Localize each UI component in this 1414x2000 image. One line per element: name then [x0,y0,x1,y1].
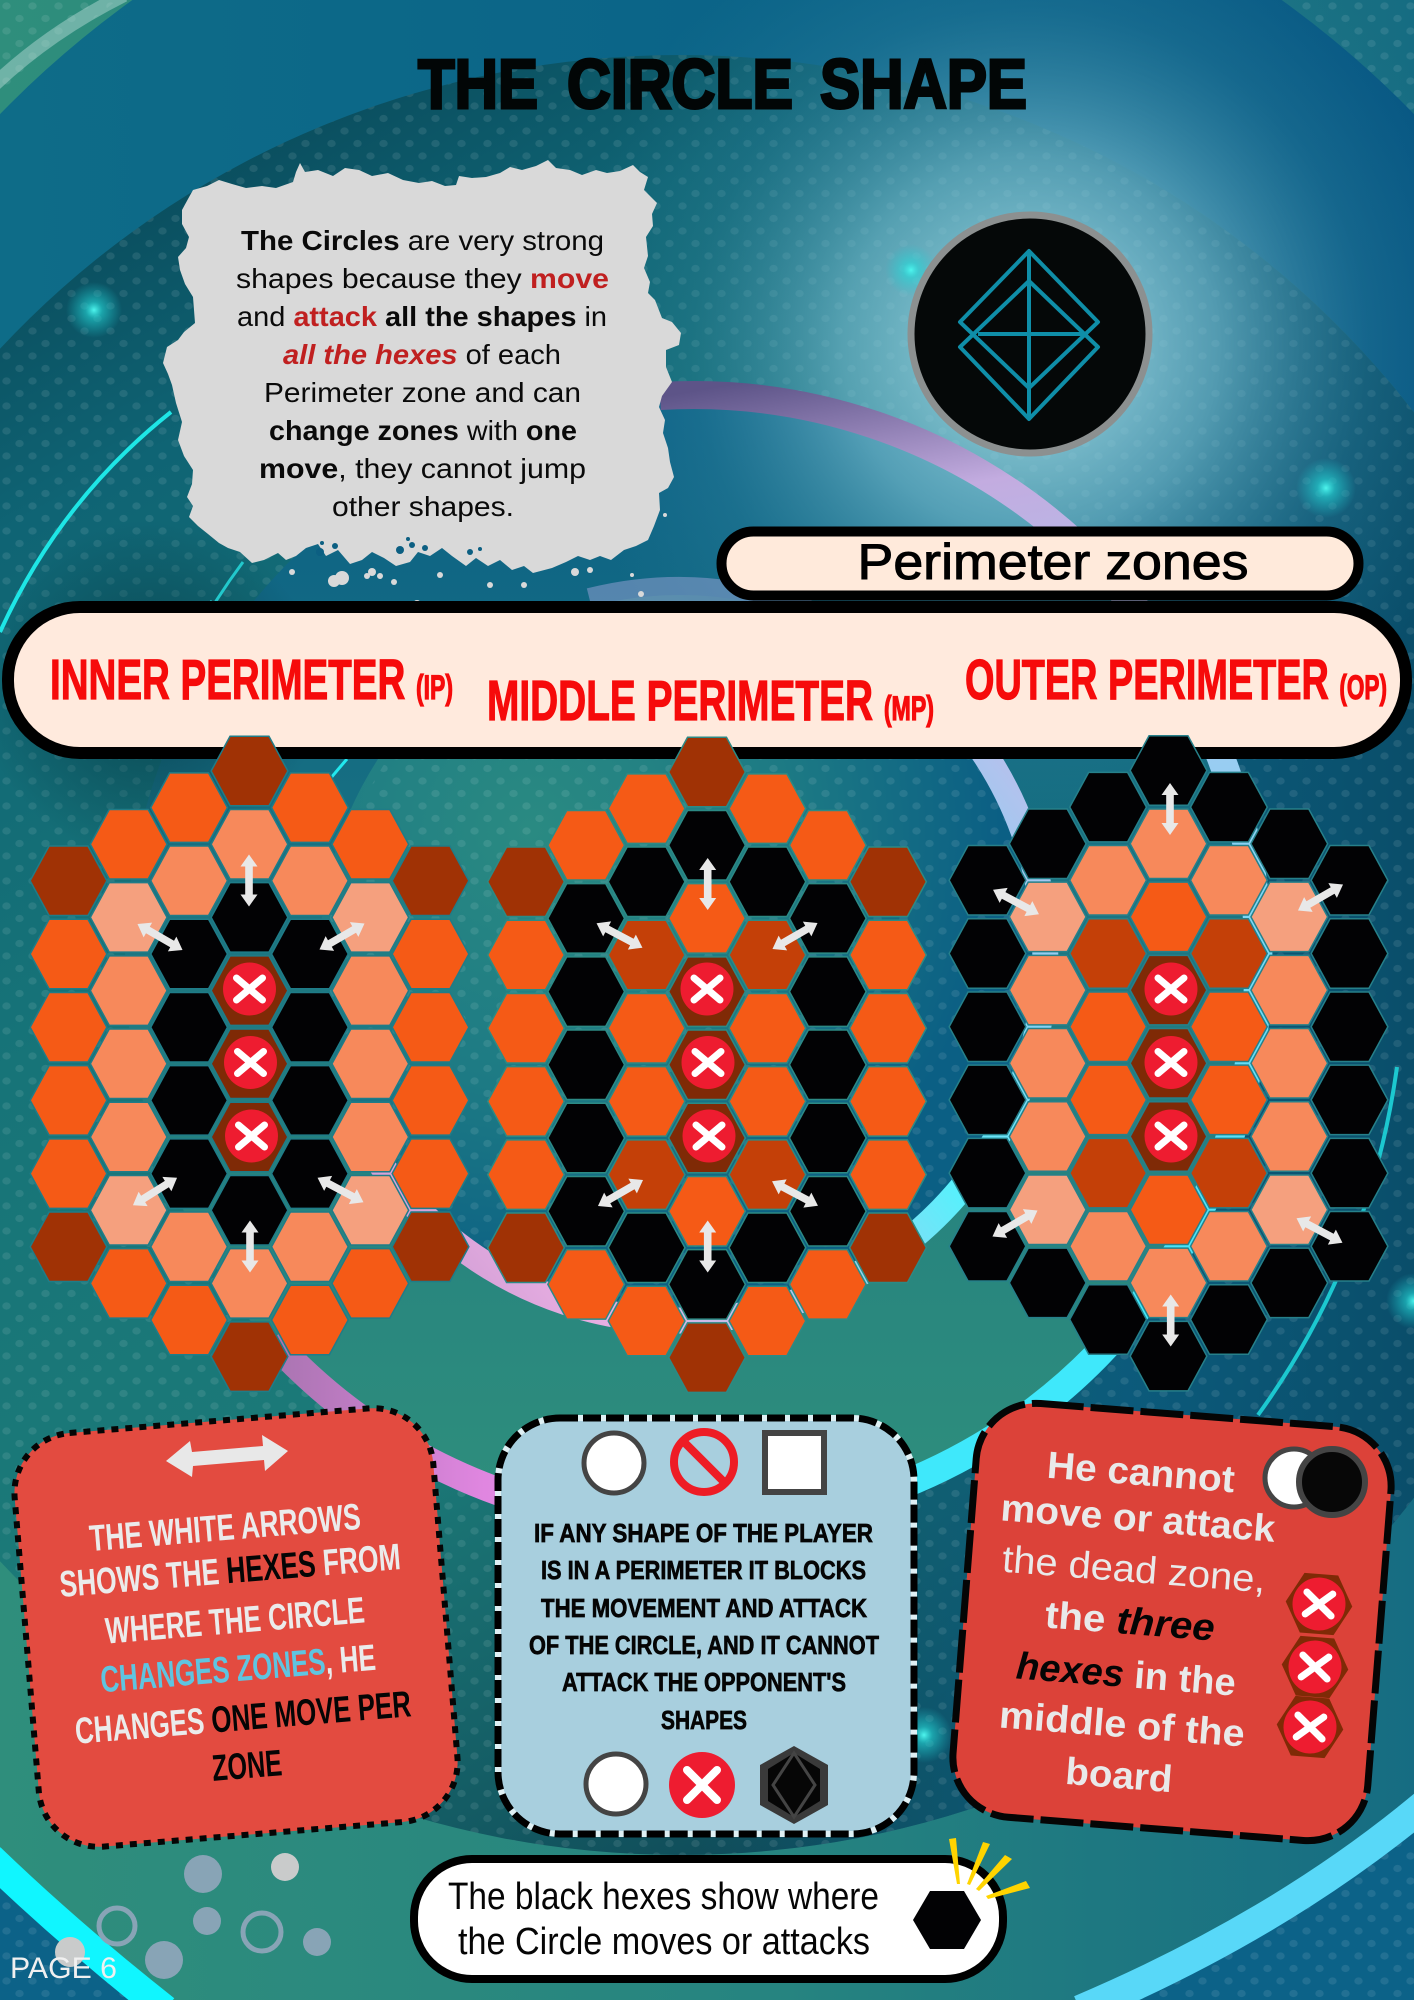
title: THE [418,45,538,123]
intro text: The Circles are very strong [241,225,604,256]
title [418,45,1027,123]
icon: white circle [584,1433,644,1493]
panel: blocking rule [498,1418,914,1834]
dead zone text: the dead zone, [1001,1539,1267,1601]
blocking rule text: ATTACK THE OPPONENT'S [562,1667,846,1697]
icon: dark circle token hex [760,1746,828,1824]
dead zone text: board [1064,1751,1174,1801]
title: SHAPE [820,45,1027,123]
title: CIRCLE [567,45,793,123]
white arrows text: ZONE [210,1742,284,1789]
legend text: the Circle moves or attacks [458,1921,870,1963]
blocking rule text: SHAPES [661,1705,747,1735]
intro text [236,225,609,522]
board: inner perimeter [31,737,468,1391]
legend text [448,1876,879,1963]
callout: black hexes legend [414,1838,1030,1979]
white arrows [593,858,822,1272]
panel: dead zone note [948,1399,1396,1845]
decorative circles [55,1853,331,1979]
intro text: other shapes. [332,491,514,522]
label: perimeter zones: Perimeter zones [858,534,1248,590]
intro text: all the hexes of each [283,339,561,370]
intro text: and attack all the shapes in [237,301,607,332]
label: perimeter zones [722,532,1358,596]
icon: dead zone hex marker [1274,1695,1346,1759]
legend text: The black hexes show where [448,1876,879,1918]
dead zone text: the three [1044,1594,1216,1650]
banner: perimeter headings [8,607,1406,753]
dead zone text: hexes in the [1015,1645,1237,1705]
heading: middle perimeter: MIDDLE PERIMETER (MP) [487,669,934,733]
dead zone text: middle of the [998,1694,1246,1756]
white arrows text: SHOWS THE HEXES FROM [58,1536,402,1605]
white arrows [988,783,1347,1346]
white arrows text: THE WHITE ARROWS [88,1496,362,1559]
icon: overlapping circles [1265,1449,1365,1515]
dead zone text [998,1445,1278,1801]
intro text: shapes because they move [236,263,609,294]
page number: PAGE 6 [10,1952,117,1985]
blocking rule text: IS IN A PERIMETER IT BLOCKS [541,1555,866,1585]
white arrows text: CHANGES ZONES, HE [99,1637,377,1700]
icon: double arrow [166,1435,288,1477]
dead zone text: He cannot [1046,1445,1237,1501]
white arrows text: WHERE THE CIRCLE [104,1589,366,1652]
blocking rule text: OF THE CIRCLE, AND IT CANNOT [529,1630,879,1660]
icon: white circle [586,1754,646,1814]
icon: white square [765,1433,824,1492]
panel: intro torn paper note [163,160,681,631]
icon: black hex [913,1891,981,1949]
intro text: Perimeter zone and can [264,377,581,408]
white arrows text [58,1496,413,1789]
white arrows text: CHANGES ONE MOVE PER [73,1683,413,1752]
board: middle perimeter [488,738,926,1392]
icon: circle shape token [911,215,1149,453]
dead zone markers [1144,962,1198,1162]
panel: white arrows note [10,1403,462,1852]
icon: red cross [669,1752,735,1818]
dead zone markers [680,962,736,1162]
icon: dead zone hex marker [1283,1572,1355,1636]
dead zone text: move or attack [999,1487,1278,1551]
icon: dead zone hex marker [1279,1635,1351,1699]
icon: prohibited sign [674,1432,734,1492]
blocking rule text: THE MOVEMENT AND ATTACK [541,1593,867,1623]
icon: yellow spark [949,1838,1030,1899]
intro text: move, they cannot jump [259,453,586,484]
blocking rule text: IF ANY SHAPE OF THE PLAYER [534,1518,873,1548]
intro text: change zones with one [269,415,577,446]
dead zone markers [223,962,278,1162]
heading: inner perimeter: INNER PERIMETER (IP) [50,648,453,712]
blocking rule text [529,1518,879,1735]
board: outer perimeter [950,736,1387,1390]
white arrows [128,854,369,1272]
